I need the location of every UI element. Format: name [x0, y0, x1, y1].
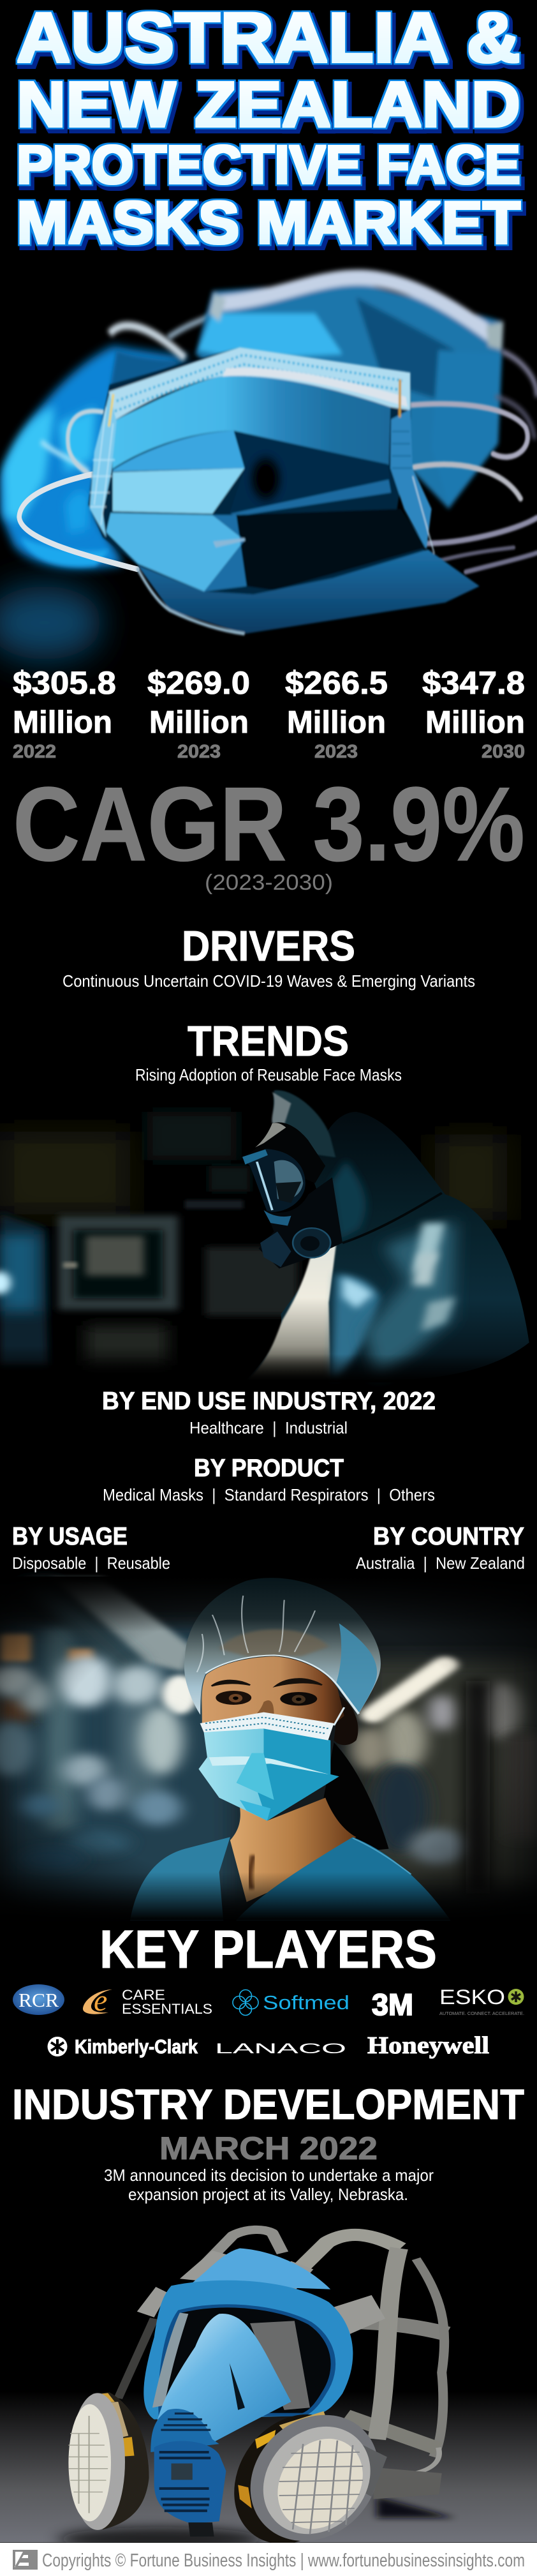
left filter cartridge [68, 2392, 149, 2530]
logo: RCR: RCR [18, 1989, 59, 2011]
country items: Australia | New Zealand [356, 1554, 525, 1573]
stat 2030 [422, 665, 525, 762]
logo: Care Essentials [83, 1984, 212, 2018]
drivers heading: DRIVERS [182, 922, 355, 970]
title: MASKS MARKET [17, 189, 520, 256]
ponytail [323, 1742, 388, 1853]
hero image: stacked surgical masks [0, 278, 537, 659]
mask frame [143, 2248, 353, 2420]
title [17, 0, 520, 256]
date: MARCH 2022 [159, 2130, 378, 2166]
suit body [240, 1112, 534, 1382]
head straps [118, 2229, 447, 2473]
neck [230, 1798, 356, 1902]
left ear loops [19, 411, 137, 569]
nose band [109, 347, 410, 421]
trends text: Rising Adoption of Reusable Face Masks [135, 1065, 402, 1084]
title: NEW ZEALAND [17, 69, 520, 140]
stat 2030: $347.8 [422, 665, 525, 701]
by end use heading: BY END USE INDUSTRY, 2022 [102, 1388, 436, 1415]
title: AUSTRALIA & [17, 0, 520, 77]
company logos [13, 1984, 524, 2059]
image: full-face respirator [0, 2229, 537, 2552]
stat 2023 base [147, 665, 250, 762]
front mask [89, 347, 480, 634]
trends heading: TRENDS [188, 1017, 349, 1065]
pleat: upper panel [112, 376, 390, 469]
development text: 3M announced its decision to undertake a major [104, 2166, 434, 2185]
nose piece [154, 2314, 291, 2443]
hairnet [184, 1578, 381, 1715]
end use items: Healthcare | Industrial [189, 1418, 348, 1437]
pleat: dark fold [230, 431, 390, 514]
full-face respirator [242, 1149, 342, 1268]
stat 2022: 2022 [13, 742, 56, 762]
development text [104, 2166, 434, 2204]
stat 2022: $305.8 [13, 665, 116, 701]
stat 2023 estimate: Million [287, 705, 386, 740]
by product heading: BY PRODUCT [194, 1455, 344, 1482]
logo: Softmed [233, 1990, 349, 2016]
back-right mask [195, 278, 503, 509]
logo: Lanaco: LANACO [215, 2041, 346, 2056]
right filter cartridge [217, 2407, 395, 2552]
studio floor [0, 2391, 537, 2550]
face [202, 1656, 344, 1725]
white coverall front [248, 1243, 336, 1380]
pleat: lit fold [113, 468, 244, 514]
logo: Care Essentials: ESSENTIALS [122, 2001, 212, 2017]
stat 2022 [13, 665, 116, 762]
key players heading: KEY PLAYERS [99, 1919, 437, 1979]
CAGR period: (2023-2030) [205, 871, 333, 895]
footer bar [0, 2543, 537, 2576]
logo: Softmed: Softmed [263, 1991, 349, 2014]
stat 2023 estimate: 2023 [314, 742, 358, 762]
product items: Medical Masks | Standard Respirators | Others [103, 1485, 435, 1504]
right ear loops [409, 352, 537, 572]
blurred lab background [0, 1112, 507, 1365]
logo: Esko [439, 1986, 524, 2016]
stat 2030: Million [425, 705, 525, 740]
stat 2023 base: Million [149, 705, 249, 740]
pleat: mid band [113, 431, 244, 472]
stat 2022: Million [13, 705, 112, 740]
by country heading: BY COUNTRY [373, 1523, 524, 1550]
stat 2023 estimate: $266.5 [285, 665, 388, 701]
logo: RCR [13, 1984, 64, 2015]
pleat: bottom fold [138, 550, 480, 634]
reflection [0, 586, 103, 659]
stat 2030: 2030 [482, 742, 525, 762]
title: PROTECTIVE FACE [17, 135, 520, 195]
logo: Esko: ESKO [439, 1986, 505, 2009]
logo: Esko: AUTOMATE. CONNECT. ACCELERATE. [439, 2012, 524, 2016]
hood and hairnet [247, 1090, 335, 1183]
vent housing [151, 2409, 226, 2536]
logo: Care Essentials: CARE [122, 1987, 165, 2003]
buckles [137, 2250, 385, 2337]
drivers text: Continuous Uncertain COVID-19 Waves & Emerging Variants [63, 971, 475, 991]
by usage heading: BY USAGE [12, 1523, 128, 1550]
side tabs [90, 393, 117, 537]
usage items: Disposable | Reusable [12, 1554, 170, 1573]
image: worker in protective suit and respirator [0, 1090, 534, 1382]
back-left blurred mask [0, 315, 212, 568]
stat 2023 estimate [285, 665, 388, 762]
image: nurse wearing surgical mask [0, 1576, 537, 1921]
logo: 3M: 3M [372, 1988, 413, 2021]
surgical mask [198, 1707, 344, 1821]
stat 2023 base: 2023 [177, 742, 221, 762]
blurred hospital corridor [0, 1576, 537, 1921]
logo: Care Essentials: e [94, 1984, 107, 2018]
logo: Honeywell: Honeywell [367, 2032, 489, 2059]
stat 2023 base: $269.0 [147, 665, 250, 701]
development text: expansion project at its Valley, Nebraska. [128, 2185, 408, 2204]
pleat: lower lit fold [106, 513, 244, 592]
logo: Kimberly-Clark: Kimberly-Clark [75, 2035, 198, 2058]
scrubs [130, 1837, 450, 1920]
footer logo [13, 2550, 38, 2570]
market size stats [13, 665, 525, 762]
